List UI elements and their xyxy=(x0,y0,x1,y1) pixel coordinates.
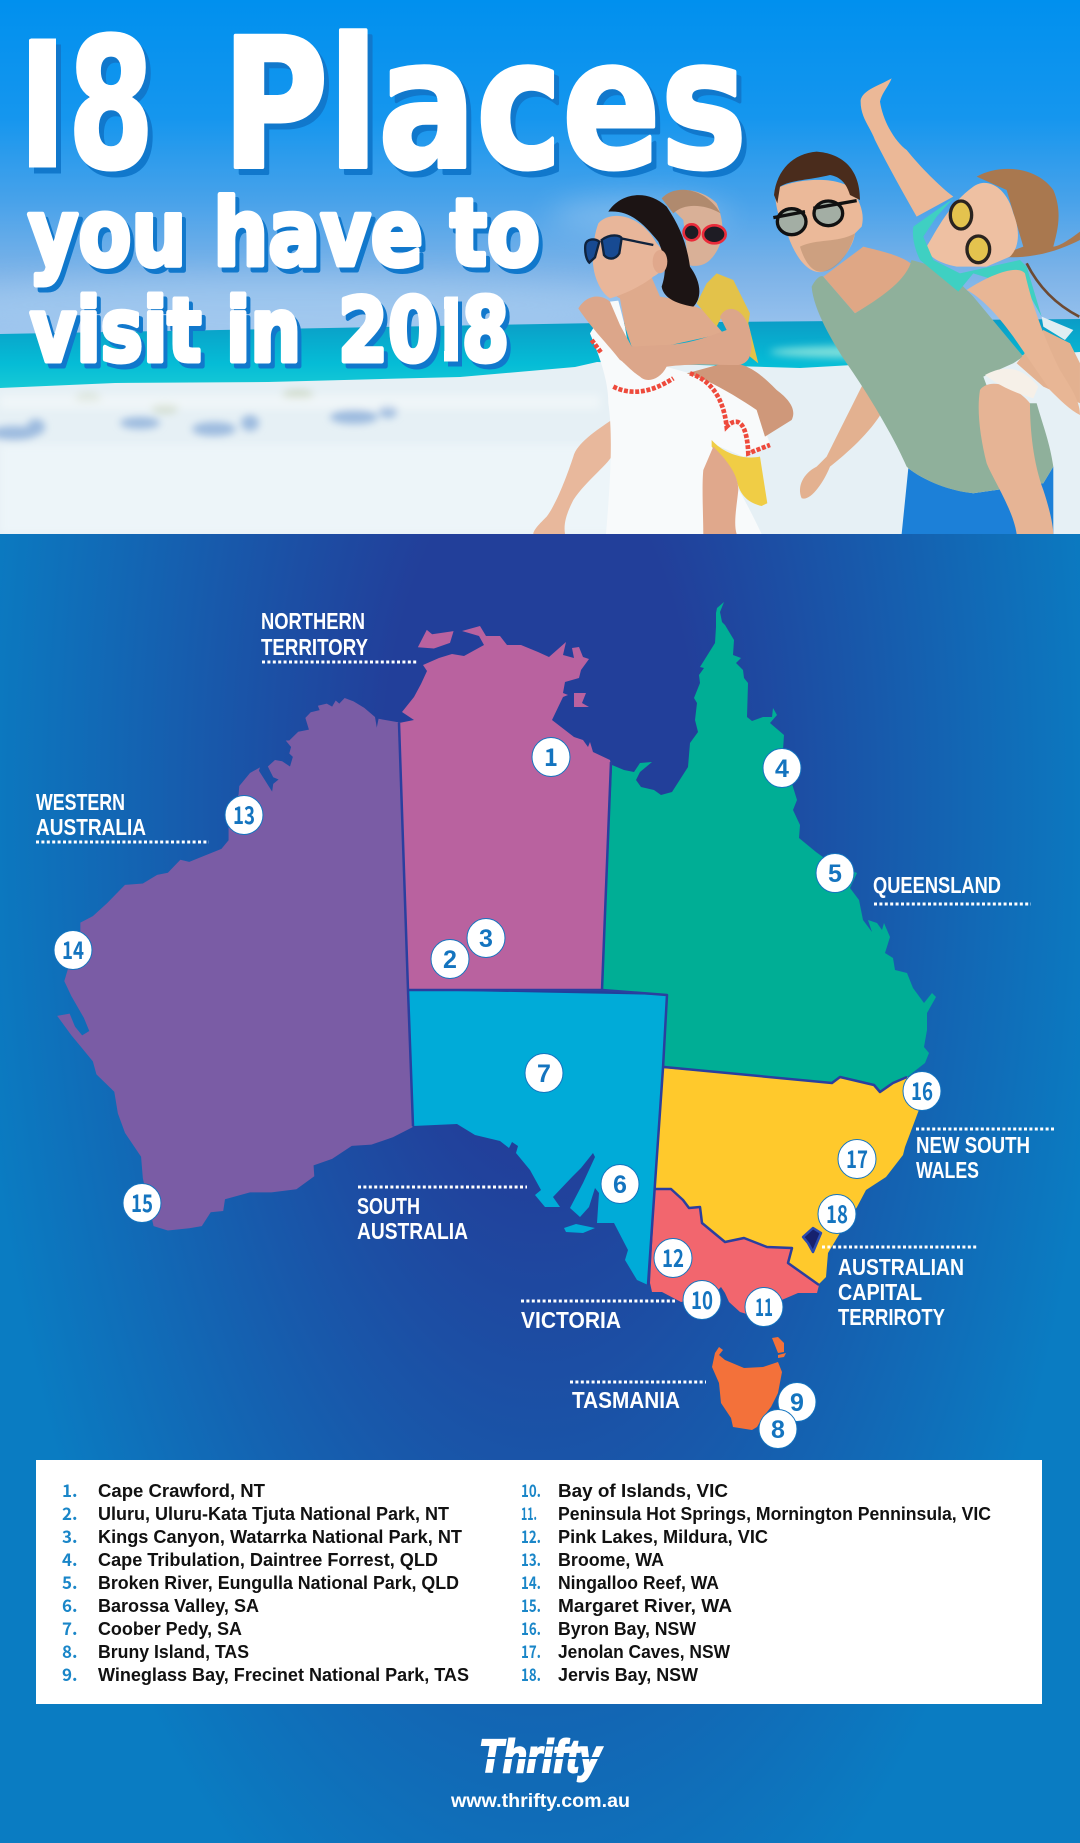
right column: 15. xyxy=(521,1592,541,1617)
marker 15 xyxy=(123,1184,161,1222)
label: Australian Capital Territory xyxy=(822,1247,977,1330)
right column: 11. xyxy=(521,1500,537,1525)
girl's face xyxy=(927,183,1018,267)
label: South Australia: SOUTH xyxy=(357,1193,420,1219)
right column: Byron Bay, NSW xyxy=(558,1619,696,1639)
title: 18 Places: 8 xyxy=(68,1,154,210)
left column: Barossa Valley, SA xyxy=(98,1596,259,1616)
subtitle: visit in 2018: visit in xyxy=(34,284,305,387)
marker 11 xyxy=(745,1288,783,1326)
marker 9: 9 xyxy=(790,1389,804,1417)
girl's arm xyxy=(578,297,751,380)
girl's white skirt xyxy=(1042,317,1073,340)
left column: Uluru, Uluru-Kata Tjuta National Park, NT xyxy=(98,1504,449,1524)
state borders xyxy=(399,723,907,1285)
subtitle: visit in 2018: 8 xyxy=(466,284,513,387)
right column: Margaret River, WA xyxy=(558,1596,732,1616)
man's sunglasses xyxy=(773,201,857,235)
marker 11: 11 xyxy=(755,1288,773,1323)
subtitle: visit in 2018: 1 xyxy=(419,277,481,381)
state: South Australia xyxy=(408,990,667,1285)
subtitle: visit in 2018 xyxy=(30,277,513,387)
girl's hair xyxy=(662,190,721,213)
marker 14 xyxy=(54,930,92,970)
left column: Kings Canyon, Watarrka National Park, NT xyxy=(98,1527,462,1547)
girl's hair xyxy=(977,169,1080,257)
right column: 17. xyxy=(521,1638,541,1663)
state: Northern Territory xyxy=(399,626,611,990)
white dress xyxy=(590,301,770,534)
left column: 1. xyxy=(62,1477,78,1502)
hero photo: family on the beach xyxy=(0,0,1080,534)
right column: Bay of Islands, VIC xyxy=(558,1481,728,1501)
girl's leg xyxy=(979,384,1053,534)
marker 5: 5 xyxy=(828,860,842,888)
marker 12: 12 xyxy=(662,1239,684,1274)
girl's lace shorts xyxy=(985,369,1038,398)
left column: 7. xyxy=(62,1615,78,1640)
woman's back xyxy=(617,273,723,347)
man's t-shirt xyxy=(812,260,1053,493)
panel: list of places xyxy=(36,1460,1042,1704)
marker 2: 2 xyxy=(443,946,457,974)
woman's arm xyxy=(687,363,793,437)
right column: Pink Lakes, Mildura, VIC xyxy=(558,1527,768,1547)
man's beard xyxy=(800,233,855,272)
marker 13 xyxy=(225,796,263,834)
marker 1: 1 xyxy=(544,738,558,773)
territory: Australian Capital Territory xyxy=(803,1228,821,1252)
label: Tasmania: TASMANIA xyxy=(572,1387,680,1413)
title: 18 Places: Places xyxy=(227,7,752,216)
marker 16 xyxy=(903,1072,941,1110)
woman's sunglasses xyxy=(585,235,653,263)
label: Western Australia xyxy=(36,789,209,842)
girl's outstretched arm xyxy=(967,270,1080,415)
girl's leg xyxy=(703,447,738,534)
label: South Australia xyxy=(357,1187,527,1244)
marker 4: 4 xyxy=(775,755,789,783)
label: Western Australia: AUSTRALIA xyxy=(36,814,146,840)
man's shorts xyxy=(902,467,1053,534)
left column: Cape Tribulation, Daintree Forrest, QLD xyxy=(98,1550,438,1570)
marker 18 xyxy=(818,1194,856,1234)
surf and foam xyxy=(0,346,1080,534)
label: Australian Capital Territory: AUSTRALIAN xyxy=(838,1254,964,1280)
left column: 2. xyxy=(62,1500,78,1525)
right column: 16. xyxy=(521,1615,541,1640)
left column: Bruny Island, TAS xyxy=(98,1642,249,1662)
marker 17 xyxy=(838,1140,876,1178)
girl's raised arm xyxy=(861,78,953,217)
map of Australia xyxy=(36,602,1054,1448)
right column: 12. xyxy=(521,1523,541,1548)
left column: Coober Pedy, SA xyxy=(98,1619,242,1639)
left column: 5. xyxy=(62,1569,78,1594)
man's head xyxy=(775,180,863,272)
girl's teal top xyxy=(913,198,1042,317)
girl's head xyxy=(662,190,722,266)
state: Victoria xyxy=(650,1189,819,1315)
label: Western Australia: WESTERN xyxy=(36,789,125,815)
right column: 13. xyxy=(521,1546,541,1571)
subtitle: you have to: you have to xyxy=(28,179,540,287)
marker 6: 6 xyxy=(613,1171,627,1199)
marker 8: 8 xyxy=(771,1416,785,1444)
label: Australian Capital Territory: TERRIROTY xyxy=(838,1304,945,1330)
marker 6 xyxy=(601,1164,639,1204)
woman's face xyxy=(593,216,665,298)
man's arm xyxy=(800,383,883,499)
right column: Jervis Bay, NSW xyxy=(558,1665,698,1685)
marker 4 xyxy=(763,748,801,788)
label: Northern Territory xyxy=(261,608,418,662)
island: Melville xyxy=(418,630,454,649)
woman carrying girl xyxy=(533,190,793,534)
left column xyxy=(62,1477,469,1686)
marker 12 xyxy=(654,1238,692,1278)
state: Tasmania xyxy=(712,1337,786,1430)
left column: 3. xyxy=(62,1523,78,1548)
clouds xyxy=(0,197,730,335)
marker 16: 16 xyxy=(911,1072,933,1107)
label: Northern Territory: TERRITORY xyxy=(261,634,368,660)
title: 18 Places xyxy=(0,0,752,216)
subtitle: visit in 2018: 20 xyxy=(338,279,438,382)
red dress trim xyxy=(592,340,770,453)
right column: Peninsula Hot Springs, Mornington Penninsula, VIC xyxy=(558,1504,991,1524)
marker 17: 17 xyxy=(846,1140,868,1175)
left column: 8. xyxy=(62,1638,78,1663)
subtitle: visit in 2018: 8 xyxy=(462,279,509,382)
right column: Broome, WA xyxy=(558,1550,664,1570)
left column: 9. xyxy=(62,1661,78,1686)
state: Queensland xyxy=(602,602,936,1092)
right column xyxy=(521,1477,991,1686)
label: South Australia: AUSTRALIA xyxy=(357,1218,468,1244)
subtitle: visit in 2018: 1 xyxy=(423,282,485,386)
label: Victoria: VICTORIA xyxy=(521,1307,621,1333)
marker 1 xyxy=(532,738,570,776)
marker 10: 10 xyxy=(691,1281,713,1316)
woman's hair xyxy=(608,195,699,307)
subtitle: you have to: you have to xyxy=(32,184,544,292)
right column: 14. xyxy=(521,1569,541,1594)
yellow skirt xyxy=(712,440,767,506)
marker 15: 15 xyxy=(131,1184,153,1219)
marker 2 xyxy=(431,940,469,978)
subtitle: visit in 2018: visit in xyxy=(30,279,301,382)
marker 3: 3 xyxy=(479,925,493,953)
website address: www.thrifty.com.au xyxy=(450,1791,630,1812)
right column: Jenolan Caves, NSW xyxy=(558,1642,730,1662)
label: New South Wales: NEW SOUTH xyxy=(916,1132,1030,1158)
right column: 18. xyxy=(521,1661,541,1686)
marker 9 xyxy=(778,1382,816,1422)
island: Groote Eylandt xyxy=(574,693,589,707)
sea xyxy=(0,319,1080,388)
man carrying girl xyxy=(773,78,1080,534)
woman's ear xyxy=(653,250,667,273)
state: Western Australia xyxy=(57,698,412,1230)
marker 14: 14 xyxy=(62,931,84,966)
girl's sunglasses xyxy=(950,201,990,263)
left column: 6. xyxy=(62,1592,78,1617)
label: Queensland: QUEENSLAND xyxy=(873,872,1001,898)
label: Northern Territory: NORTHERN xyxy=(261,608,365,634)
title: 18 Places: 8 xyxy=(73,7,159,216)
man's neck xyxy=(823,247,911,313)
label: New South Wales: WALES xyxy=(916,1157,979,1183)
sky xyxy=(0,0,1080,335)
marker 3 xyxy=(467,918,505,958)
girl's other leg xyxy=(1017,330,1080,403)
logo: Thrifty: Thrifty xyxy=(479,1730,603,1782)
girl's yellow shirt xyxy=(697,273,758,363)
man's hair xyxy=(774,152,860,203)
marker 18: 18 xyxy=(826,1195,848,1230)
marker 13: 13 xyxy=(233,796,255,831)
girl's braid xyxy=(1027,263,1079,317)
left column: Cape Crawford, NT xyxy=(98,1481,265,1501)
marker 7: 7 xyxy=(537,1060,551,1088)
marker 5 xyxy=(816,854,854,892)
left column: Wineglass Bay, Frecinet National Park, TAS xyxy=(98,1665,469,1685)
marker 8 xyxy=(759,1410,797,1448)
label: New South Wales xyxy=(916,1129,1054,1183)
right column: 10. xyxy=(521,1477,541,1502)
title: 18 Places: Places xyxy=(222,1,747,210)
left column: 4. xyxy=(62,1546,78,1571)
left column: Broken River, Eungulla National Park, QLD xyxy=(98,1573,459,1593)
girl's back leg xyxy=(533,420,613,534)
marker 7 xyxy=(525,1054,563,1092)
island: Kangaroo Island xyxy=(564,1224,595,1233)
right column: Ningalloo Reef, WA xyxy=(558,1573,719,1593)
state: New South Wales xyxy=(655,1068,925,1284)
girl's red sunglasses xyxy=(684,224,726,243)
marker 10 xyxy=(683,1280,721,1320)
subtitle: visit in 2018: 20 xyxy=(342,284,442,387)
label: Australian Capital Territory: CAPITAL xyxy=(838,1279,922,1305)
